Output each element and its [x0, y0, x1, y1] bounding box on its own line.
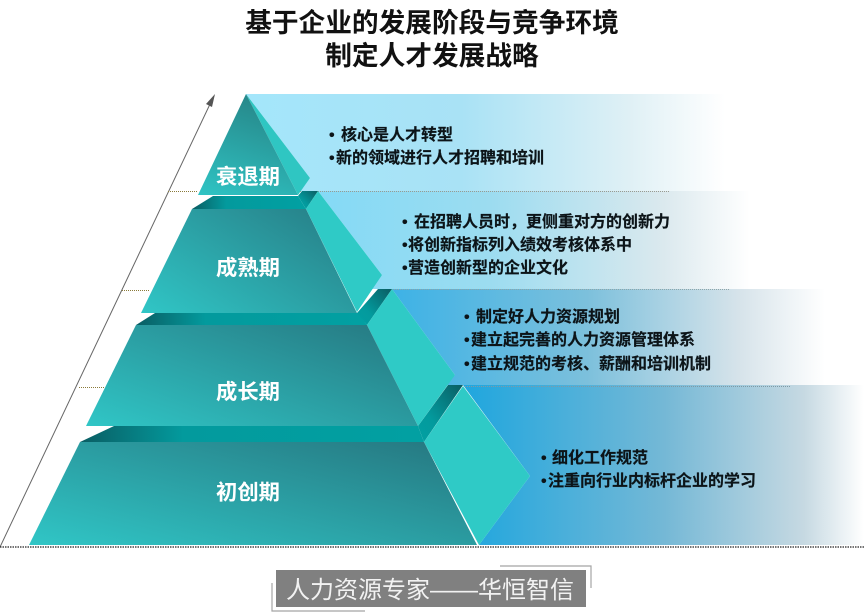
text: 衰退期 points: • [329, 150, 335, 167]
baseline [0, 546, 864, 548]
text: 初创期 points: • [541, 473, 547, 490]
pyramid tier: 成熟期 [141, 191, 382, 313]
pyramid tier: 衰退期 [198, 94, 310, 195]
text: 成长期 points: • [464, 309, 470, 326]
text: 成熟期 points: • [402, 260, 408, 277]
label: 成熟期 [216, 255, 280, 280]
text: 成长期 points: • [464, 356, 470, 373]
text: 成熟期 points: • [402, 237, 408, 254]
title: 制定人才发展战略 [325, 41, 539, 71]
text: 衰退期 points [329, 125, 544, 167]
text: 成熟期 points: 在招聘人员时，更侧重对方的创新力 [414, 212, 670, 231]
text: 成长期 points [464, 307, 711, 373]
title: 基于企业的发展阶段与竞争环境 [245, 8, 619, 38]
pyramid tier: 初创期 [29, 385, 530, 545]
footer banner [272, 566, 591, 611]
text: 成长期 points: • [464, 332, 470, 349]
text: 初创期 points: 注重向行业内标杆企业的学习 [548, 471, 756, 490]
text: 初创期 points: 细化工作规范 [552, 448, 648, 467]
text: 衰退期 points: 新的领域进行人才招聘和培训 [336, 148, 544, 167]
panel: 成熟期 band [318, 191, 750, 289]
panel: 成长期 band [392, 289, 825, 385]
label: 成长期 [216, 380, 280, 404]
text: 衰退期 points: 核心是人才转型 [341, 125, 453, 144]
title [245, 8, 619, 71]
footer text: 人力资源专家——华恒智信 [286, 577, 574, 604]
growth axis arrow [0, 94, 215, 547]
label: 衰退期 [216, 164, 280, 189]
text: 衰退期 points: • [329, 127, 335, 144]
pyramid tier: 成长期 [86, 289, 455, 426]
text: 初创期 points [541, 448, 756, 490]
text: 成熟期 points: • [402, 214, 408, 231]
text: 成长期 points: 建立规范的考核、薪酬和培训机制 [471, 354, 711, 373]
text: 成长期 points: 建立起完善的人力资源管理体系 [471, 330, 695, 349]
text: 成长期 points: 制定好人力资源规划 [476, 307, 620, 326]
text: 成熟期 points: 将创新指标列入绩效考核体系中 [408, 235, 632, 254]
stage dividers [79, 192, 790, 388]
panel: 衰退期 band [246, 94, 725, 191]
panel: 初创期 band [463, 385, 864, 545]
text: 成熟期 points [402, 212, 670, 277]
text: 成熟期 points: 营造创新型的企业文化 [408, 258, 568, 277]
label: 初创期 [216, 480, 280, 504]
text: 初创期 points: • [541, 450, 547, 467]
